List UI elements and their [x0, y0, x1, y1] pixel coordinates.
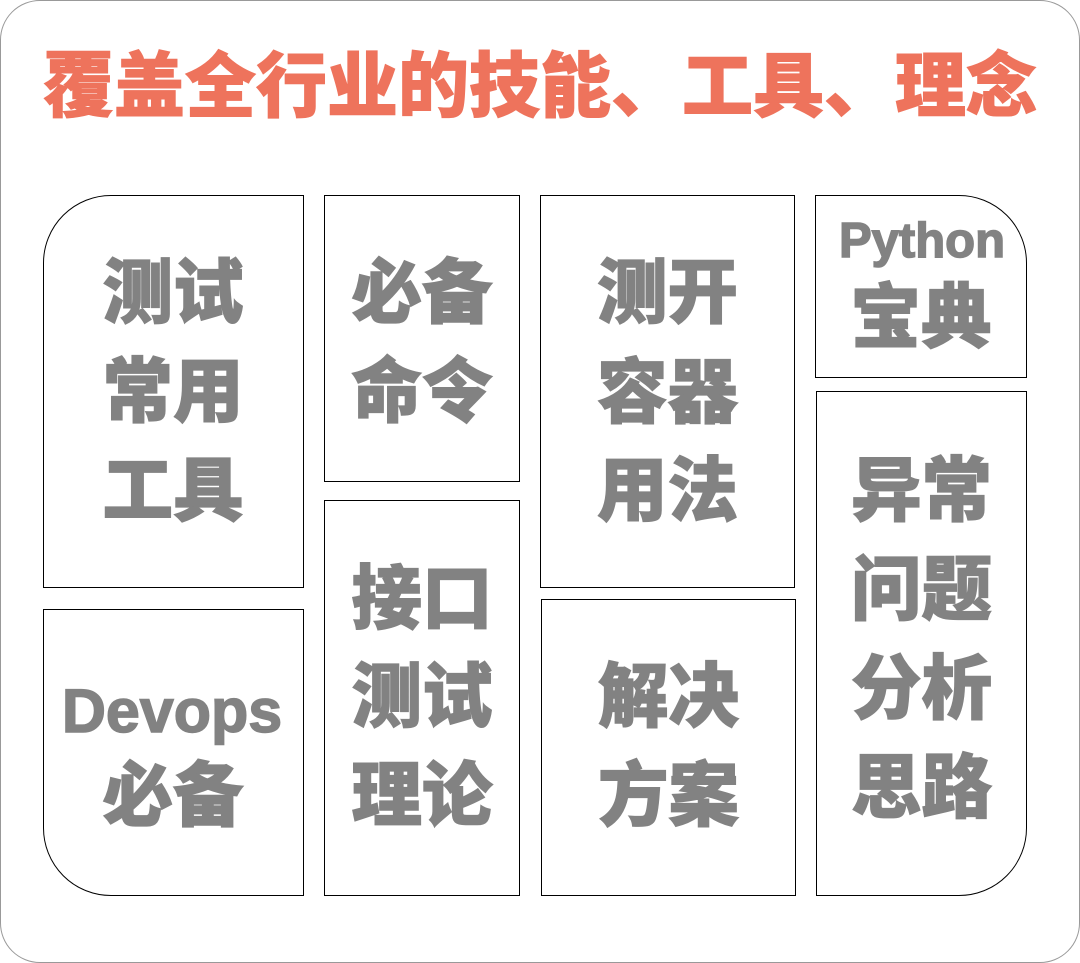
panel: testing tools: 工具 [102, 451, 244, 530]
panel: exception analysis: 异常 [851, 451, 992, 530]
title: 覆盖全行业的技能、工具、理念 [43, 48, 1037, 127]
panel: python [815, 195, 1027, 378]
panel: python: Python [839, 214, 1005, 268]
panel: python: 宝典 [850, 278, 992, 357]
panel: exception analysis: 问题 [851, 550, 992, 629]
panel: api testing theory: 接口 [352, 559, 492, 638]
panel: exception analysis: 分析 [851, 649, 992, 728]
panel: test dev containers: 用法 [597, 451, 738, 530]
panel: devops: 必备 [102, 756, 244, 835]
panel: exception analysis: 思路 [851, 748, 992, 827]
panel: api testing theory: 理论 [352, 756, 492, 835]
panel: commands: 命令 [352, 352, 492, 431]
panel: testing tools [43, 195, 304, 588]
panel: commands: 必备 [352, 253, 492, 332]
panel: solutions: 方案 [598, 756, 739, 835]
panel: solutions [541, 599, 796, 896]
panel: exception analysis [816, 391, 1027, 896]
panel: test dev containers: 容器 [597, 353, 738, 432]
panel: devops [43, 609, 304, 896]
panel: test dev containers [540, 195, 795, 588]
panel: devops: Devops [62, 677, 282, 745]
panel: testing tools: 测试 [102, 253, 244, 332]
panel: api testing theory [324, 500, 520, 896]
panel: testing tools: 常用 [102, 352, 244, 431]
panel: test dev containers: 测开 [597, 253, 738, 332]
panel: solutions: 解决 [598, 657, 739, 736]
panel: commands [324, 195, 520, 482]
panel: api testing theory: 测试 [352, 657, 492, 736]
